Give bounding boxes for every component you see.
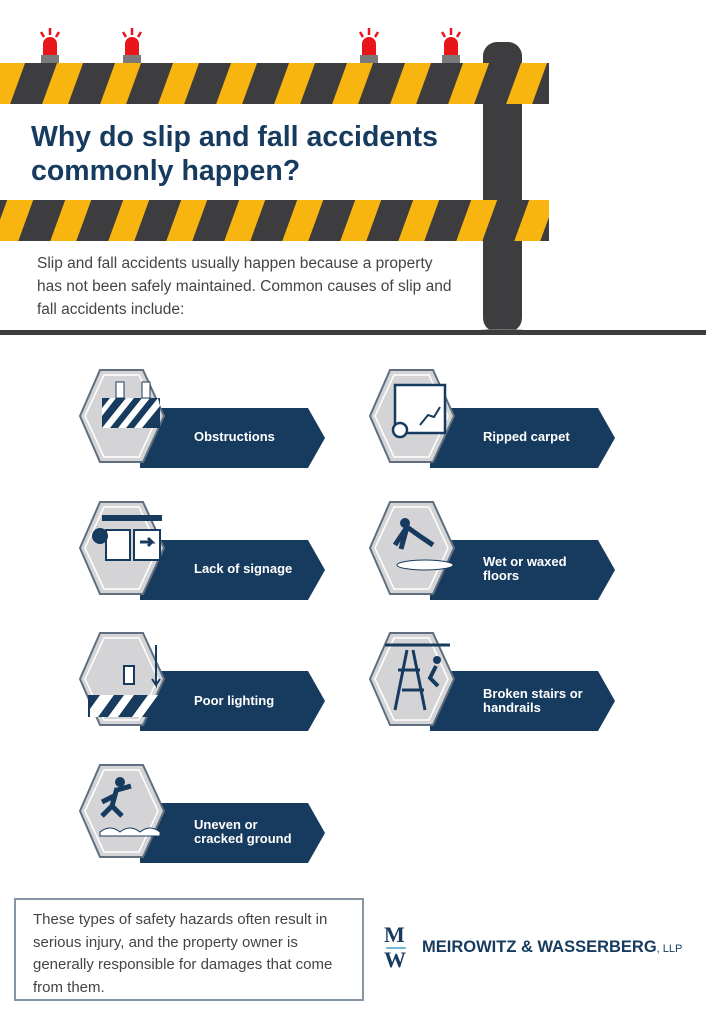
logo: M: [384, 922, 405, 947]
logo: MEIROWITZ & WASSERBERG, LLP: [422, 938, 682, 956]
post: [483, 42, 522, 332]
title: Why do slip and fall accidents commonly happen?: [31, 121, 438, 187]
item: broken stairs: [370, 633, 615, 731]
labels: Obstructions: [194, 429, 275, 444]
bottom stripe bar: [0, 200, 549, 241]
logo: W: [384, 947, 406, 972]
item: obstructions: [80, 370, 325, 468]
text: Ripped carpet: [483, 429, 570, 444]
text: Uneven or: [194, 817, 258, 832]
text: cracked ground: [194, 831, 292, 846]
item: uneven ground: [80, 765, 325, 863]
text: Poor lighting: [194, 693, 274, 708]
text: Broken stairs or: [483, 686, 583, 701]
text: Lack of signage: [194, 561, 292, 576]
item: ripped carpet: [370, 370, 615, 468]
item: lack of signage: [80, 502, 325, 600]
cause items: [79, 369, 615, 863]
ground line: [0, 330, 706, 335]
barricade illustration: [0, 28, 706, 335]
icon: warning lights: [41, 28, 460, 63]
item: wet floors: [370, 502, 615, 600]
text: handrails: [483, 700, 541, 715]
intro text: Slip and fall accidents usually happen because a property has not been safely maintained. Common causes of slip and fall accidents include:: [37, 255, 451, 318]
top stripe bar: [0, 63, 549, 104]
text: floors: [483, 568, 519, 583]
text: Wet or waxed: [483, 554, 567, 569]
closing text box: These types of safety hazards often result in serious injury, and the property owner is generally responsible for damages that come from them.: [33, 911, 332, 996]
item: poor lighting: [80, 633, 325, 731]
logo: [384, 922, 682, 972]
